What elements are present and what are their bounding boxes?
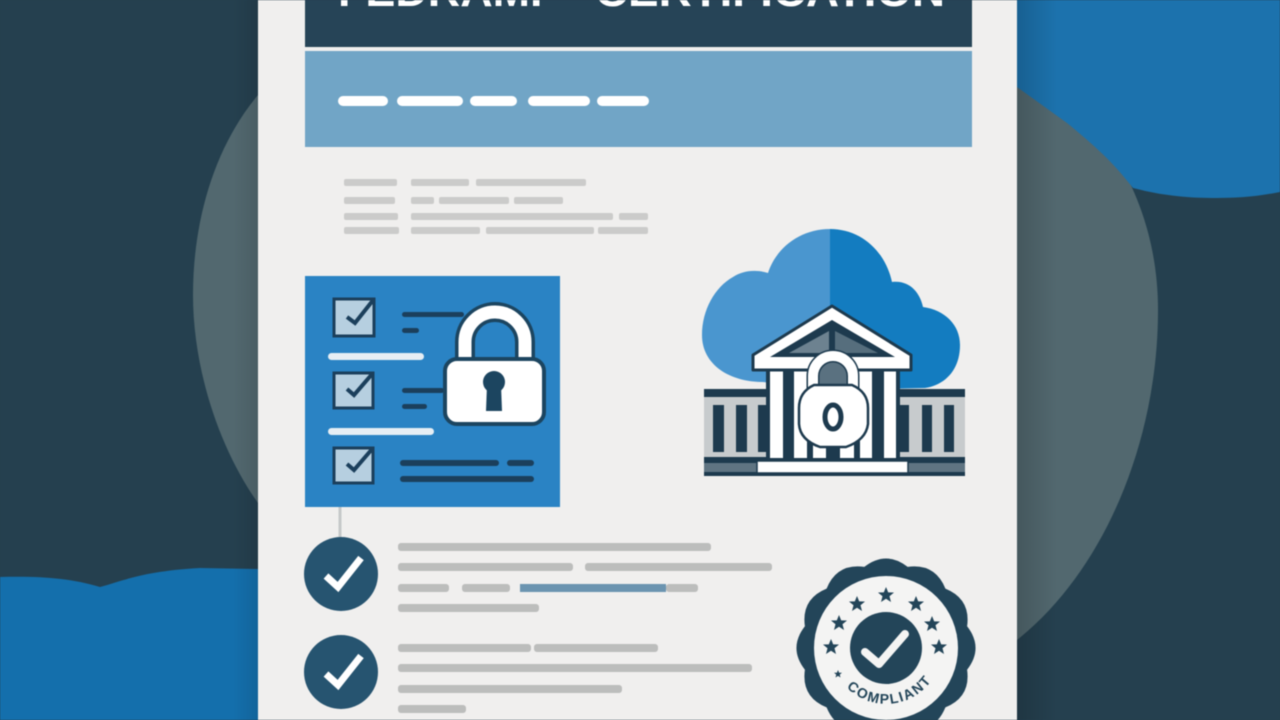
cloud xyxy=(702,229,960,390)
intro text placeholder lines xyxy=(344,179,648,234)
icon: padlock xyxy=(445,312,544,424)
seal label: COMPLIANT xyxy=(848,674,930,704)
icon: checkbox 2 xyxy=(334,373,373,408)
connector line xyxy=(338,507,342,538)
pediment xyxy=(753,306,911,370)
seal check mark xyxy=(865,634,905,664)
text block: item 1 placeholder lines xyxy=(398,543,772,612)
seal stars xyxy=(823,587,947,678)
title xyxy=(338,0,945,16)
icon: check circle 1 xyxy=(304,537,378,611)
title banner xyxy=(305,0,972,47)
building padlock xyxy=(799,356,868,447)
subtitle band xyxy=(305,51,972,147)
panel: security checklist xyxy=(305,276,560,507)
building wings xyxy=(704,389,965,476)
icon: checkbox 3 xyxy=(334,448,373,483)
icon: check circle 2 xyxy=(304,635,378,709)
plinth xyxy=(757,461,908,473)
building columns xyxy=(766,370,900,458)
document page xyxy=(258,0,1017,720)
icon: checkbox 1 xyxy=(334,299,374,336)
text block: item 2 placeholder lines xyxy=(398,644,752,713)
icon: cloud and government building xyxy=(702,229,965,476)
checklist lines xyxy=(328,312,534,482)
compliance seal badge xyxy=(796,558,976,720)
